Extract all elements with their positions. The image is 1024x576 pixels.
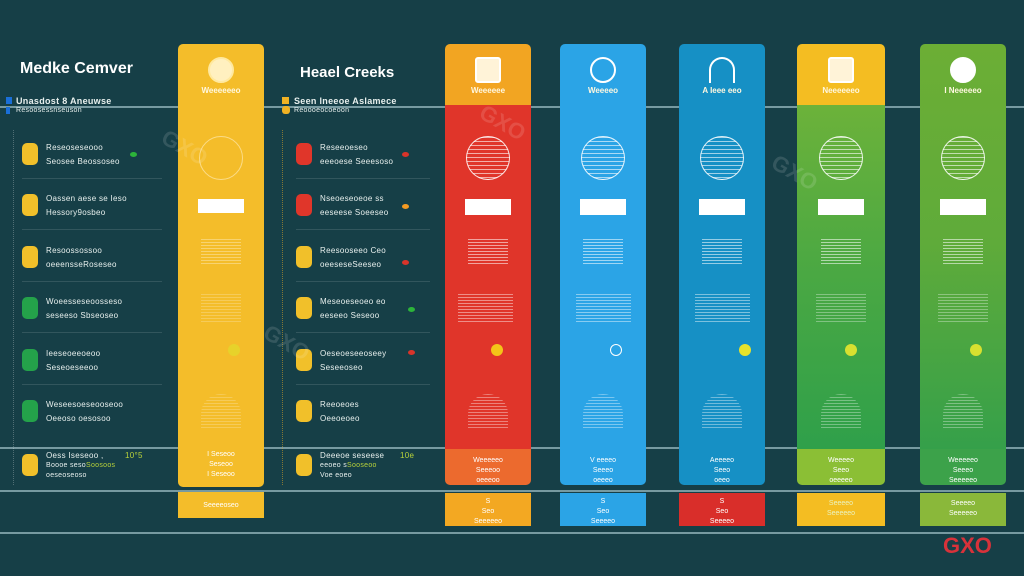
box: orange bottom: S <box>486 498 490 505</box>
list: left rows <box>13 130 162 485</box>
column: red: Weeeeee <box>471 86 505 95</box>
list: middle rows: 10e <box>400 451 414 460</box>
list: left rows: Reseoseseooo <box>46 143 103 152</box>
box: blue bottom: Seeeeo <box>591 518 615 525</box>
list: left rows: 10°5 <box>125 451 143 460</box>
column: green: Seeeeeo <box>949 477 977 484</box>
column: yellow-green <box>797 44 885 485</box>
column: light blue: Seeeo <box>593 467 613 474</box>
column: yellow-green: Neeeeeeo <box>822 86 860 95</box>
box: yellow bottom <box>178 492 264 518</box>
box: yellow bottom 2 <box>797 493 885 526</box>
list: left rows: Ieeseoeeoeoo <box>46 349 100 358</box>
title: middle heading: Heael Creeks <box>300 64 394 81</box>
column: yellow: Seseoo <box>209 461 233 468</box>
list: middle rows: Reeoeoes <box>320 400 359 409</box>
column: red <box>445 44 531 485</box>
subtitle: middle legend: Reoooeocoeoon <box>294 107 349 114</box>
column: red: Weeeeeo <box>473 457 503 464</box>
title: left heading: Medke Cemver <box>20 60 133 77</box>
text: GXO <box>767 150 822 196</box>
list: middle rows: Deeeoe seseese <box>320 451 384 460</box>
list: middle rows: Reseeoeseo <box>320 143 368 152</box>
list: left rows: Seosee Beossoseo <box>46 157 120 166</box>
subtitle: left legend: Resoosessnseuson <box>16 107 82 114</box>
list: left rows: Woeesseseoosseso <box>46 297 122 306</box>
list: left rows: Oeeoso oesosoo <box>46 414 111 423</box>
list: middle rows: Reesooseeo Ceo <box>320 246 386 255</box>
box: orange bottom <box>445 493 531 526</box>
list: middle rows: eeeoese Seeesoso <box>320 157 393 166</box>
icon: circle <box>590 57 616 83</box>
column: yellow: I Seseoo <box>207 451 235 458</box>
list: left rows: Boooe sesoSoosoos <box>46 462 115 469</box>
box: green bottom <box>920 493 1006 526</box>
list: middle rows: Oeseoeseeoseey <box>320 349 386 358</box>
column: yellow <box>178 44 264 487</box>
list: left rows: seseeso Sbseoseo <box>46 311 118 320</box>
list: left rows: oeeensseRoseseo <box>46 260 117 269</box>
icon: globe <box>950 57 976 83</box>
list: left rows: Weseesoeseooseoo <box>46 400 123 409</box>
box: orange bottom: Seeeeeo <box>474 518 502 525</box>
column: dark blue: Seeo <box>714 467 730 474</box>
column: dark blue: oeeo <box>714 477 730 484</box>
list: middle rows: Voe eoeo <box>320 472 352 479</box>
icon: box <box>828 57 854 83</box>
list: middle rows: Oeeoeoeo <box>320 414 360 423</box>
text: GXO <box>475 100 530 146</box>
subtitle: middle legend <box>282 96 397 114</box>
box: red bottom <box>679 493 765 526</box>
subtitle: middle legend: Seen lneeoe Aslamece <box>294 96 397 106</box>
list: middle rows: Nseoeseoeoe ss <box>320 194 384 203</box>
subtitle: left legend <box>6 96 112 114</box>
column: yellow: I Seseoo <box>207 471 235 478</box>
column: yellow: Weeeeeeo <box>202 86 240 95</box>
list: left rows: Oess Iseseoo , <box>46 451 104 460</box>
list: left rows: Resoossossoo <box>46 246 102 255</box>
list: left rows: Seseoeseeoo <box>46 363 98 372</box>
column: red: Seeeoo <box>476 467 500 474</box>
column: yellow-green: Weeeeo <box>828 457 854 464</box>
column: red: oeeeoo <box>476 477 500 484</box>
column: light blue: Weeeeo <box>588 86 618 95</box>
box: green bottom: Seeeeo <box>951 500 975 507</box>
column: green: Seeeo <box>953 467 973 474</box>
box: blue bottom <box>560 493 646 526</box>
list: middle rows: oeeseseSeeseo <box>320 260 381 269</box>
list: left rows: oeseoseoso <box>46 472 87 479</box>
column: yellow-green: oeeeeo <box>829 477 853 484</box>
column: green: Weeeeeo <box>948 457 978 464</box>
text: GXO <box>259 320 314 366</box>
column: dark blue: A Ieee eeo <box>702 86 742 95</box>
box: blue bottom: Seo <box>597 508 609 515</box>
list: middle rows: eeoeo sSooseoo <box>320 462 377 469</box>
watermarks: GXO <box>157 125 212 171</box>
list: left rows: Hessory9osbeo <box>46 208 106 217</box>
column: light blue: oeeeo <box>593 477 613 484</box>
box: orange bottom: Seo <box>482 508 494 515</box>
box: green bottom: Seeeeeo <box>949 510 977 517</box>
column: dark blue <box>679 44 765 485</box>
icon: tent <box>709 57 735 83</box>
list: middle rows: eeseese Soeeseo <box>320 208 389 217</box>
box: yellow bottom 2: Seeeeeo <box>827 510 855 517</box>
icon: building <box>208 57 234 83</box>
box: blue bottom: S <box>601 498 605 505</box>
box: red bottom: Seo <box>716 508 728 515</box>
list: middle rows <box>282 130 430 485</box>
box: red bottom: Seeeeo <box>710 518 734 525</box>
list: middle rows: Meseoeseoeo eo <box>320 297 386 306</box>
column: dark blue: Aeeeeo <box>710 457 734 464</box>
column: yellow-green: Seeo <box>833 467 849 474</box>
list: left rows: Oassen aese se Ieso <box>46 194 127 203</box>
column: light blue <box>560 44 646 485</box>
box: yellow bottom: Seeeeoseo <box>203 502 239 509</box>
column: light blue: V eeeeo <box>590 457 616 464</box>
subtitle: left legend: Unasdost 8 Aneuwse <box>16 96 112 106</box>
box: red bottom: S <box>720 498 724 505</box>
icon: box <box>475 57 501 83</box>
list: middle rows: Seseeoseo <box>320 363 363 372</box>
column: green: I Neeeeeo <box>944 86 982 95</box>
list: middle rows: eeseeo Seseoo <box>320 311 380 320</box>
logo: GXO: GXO <box>943 533 992 558</box>
column: green <box>920 44 1006 485</box>
box: yellow bottom 2: Seeeeo <box>829 500 853 507</box>
